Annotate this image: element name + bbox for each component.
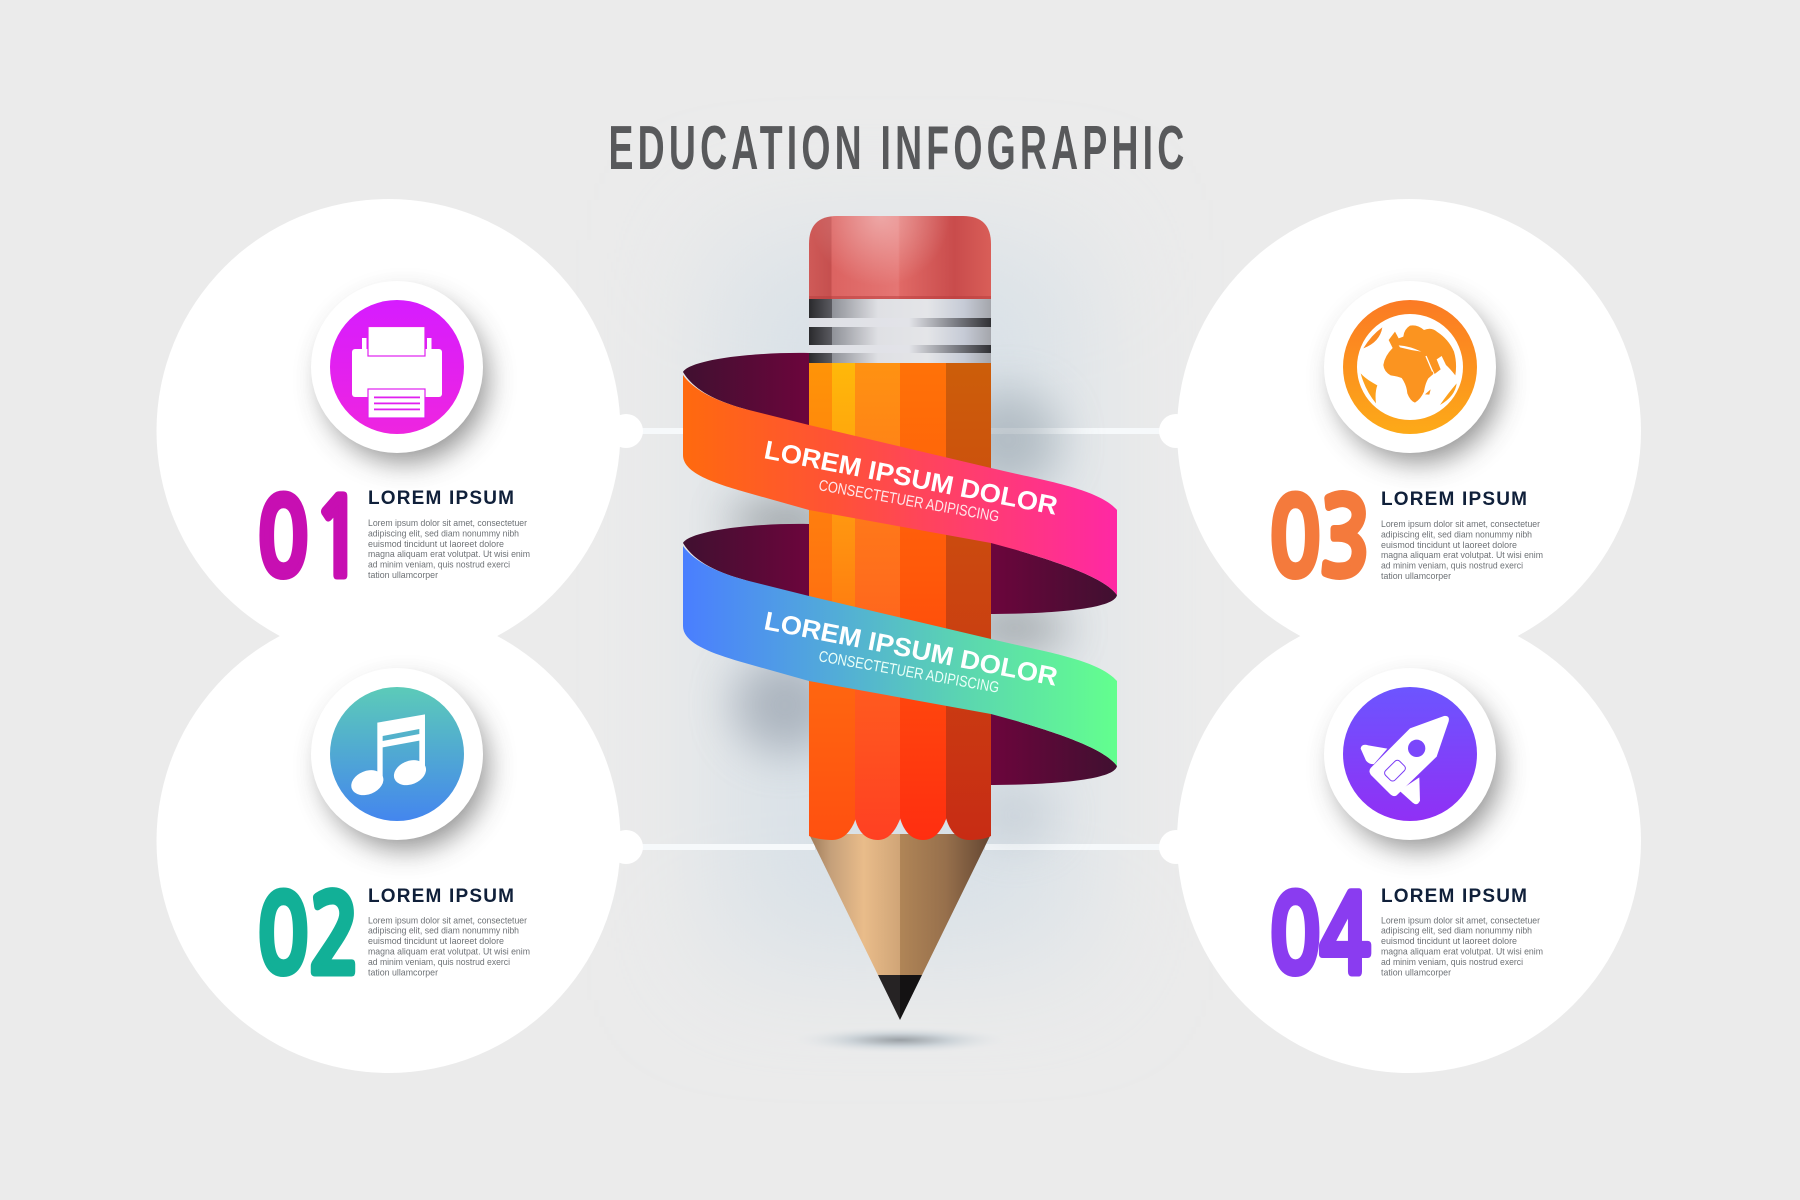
number 02: 02 [257, 882, 361, 990]
body text: euismod tincidunt ut laoreet dolore [368, 935, 504, 946]
body text: adipiscing elit, sed diam nonummy nibh [1381, 925, 1532, 936]
ground shadow [788, 1026, 1012, 1054]
pencil [809, 216, 991, 1020]
body text: magna aliquam erat volutpat. Ut wisi enim [368, 945, 530, 956]
pencil and ribbon cast shadows [730, 390, 1067, 845]
panel circle [1177, 199, 1641, 663]
connector bump [1159, 414, 1193, 448]
panel: item 03 [1159, 199, 1641, 663]
body text: ad minim veniam, quis nostrud exerci [1381, 560, 1523, 571]
connector bump [1159, 830, 1193, 864]
body text: Lorem ipsum dolor sit amet, consectetuer [1381, 914, 1540, 925]
background haze behind pencil [720, 240, 1080, 960]
heading: LOREM IPSUM [1381, 886, 1527, 907]
ribbon 1 front band [683, 375, 1117, 595]
icon: printer [311, 281, 487, 462]
heading: LOREM IPSUM [1381, 489, 1527, 510]
body text: Lorem ipsum dolor sit amet, consectetuer [368, 517, 527, 528]
connector bump [609, 830, 643, 864]
pencil ferrule [809, 299, 991, 363]
ribbon 1 subtitle: CONSECTETUER ADIPISCING [817, 477, 1000, 526]
body text [368, 517, 530, 580]
body text: ad minim veniam, quis nostrud exerci [1381, 956, 1523, 967]
pencil body stripes [809, 363, 991, 840]
ribbon back: dark inner surfaces [683, 353, 1117, 785]
ribbon 2 title: LOREM IPSUM DOLOR [762, 605, 1060, 692]
title: EDUCATION INFOGRAPHIC [608, 114, 1188, 183]
panel: item 01 [156, 199, 643, 663]
body text: adipiscing elit, sed diam nonummy nibh [368, 527, 519, 538]
body text: tation ullamcorper [1381, 570, 1451, 581]
body text: adipiscing elit, sed diam nonummy nibh [1381, 528, 1532, 539]
number 01: 01 [257, 485, 365, 593]
body text: magna aliquam erat volutpat. Ut wisi enim [368, 548, 530, 559]
connector bump [609, 414, 643, 448]
body text: ad minim veniam, quis nostrud exerci [368, 956, 510, 967]
body text: euismod tincidunt ut laoreet dolore [1381, 539, 1517, 550]
body text: Lorem ipsum dolor sit amet, consectetuer [1381, 518, 1540, 529]
panel circle [1177, 609, 1641, 1073]
panel circle [156, 609, 620, 1073]
body text: magna aliquam erat volutpat. Ut wisi enim [1381, 549, 1543, 560]
pencil eraser [809, 216, 991, 299]
body text: euismod tincidunt ut laoreet dolore [368, 538, 504, 549]
number 03: 03 [1269, 485, 1371, 593]
body text: tation ullamcorper [368, 966, 438, 977]
ribbon 2 subtitle: CONSECTETUER ADIPISCING [817, 648, 1000, 697]
body text: euismod tincidunt ut laoreet dolore [1381, 935, 1517, 946]
body text [1381, 518, 1543, 581]
body text [368, 914, 530, 977]
heading: LOREM IPSUM [368, 886, 514, 907]
body text: tation ullamcorper [1381, 966, 1451, 977]
body text: tation ullamcorper [368, 569, 438, 580]
number 04: 04 [1269, 882, 1371, 990]
connector lines [620, 428, 1180, 850]
body text: ad minim veniam, quis nostrud exerci [368, 559, 510, 570]
panel: item 02 [156, 609, 643, 1073]
body text [1381, 914, 1543, 977]
ribbon 2 front band [683, 546, 1117, 766]
pencil wood tip [809, 834, 991, 975]
panel circle [156, 199, 620, 663]
ribbon 1 title: LOREM IPSUM DOLOR [762, 434, 1060, 521]
pencil lead [878, 975, 922, 1020]
icon: globe [1324, 281, 1500, 462]
body text: magna aliquam erat volutpat. Ut wisi enim [1381, 945, 1543, 956]
body text: Lorem ipsum dolor sit amet, consectetuer [368, 914, 527, 925]
body text: adipiscing elit, sed diam nonummy nibh [368, 925, 519, 936]
panel: item 04 [1159, 609, 1641, 1073]
icon: music note [311, 668, 487, 849]
heading: LOREM IPSUM [368, 488, 514, 509]
icon: rocket [1324, 668, 1500, 849]
